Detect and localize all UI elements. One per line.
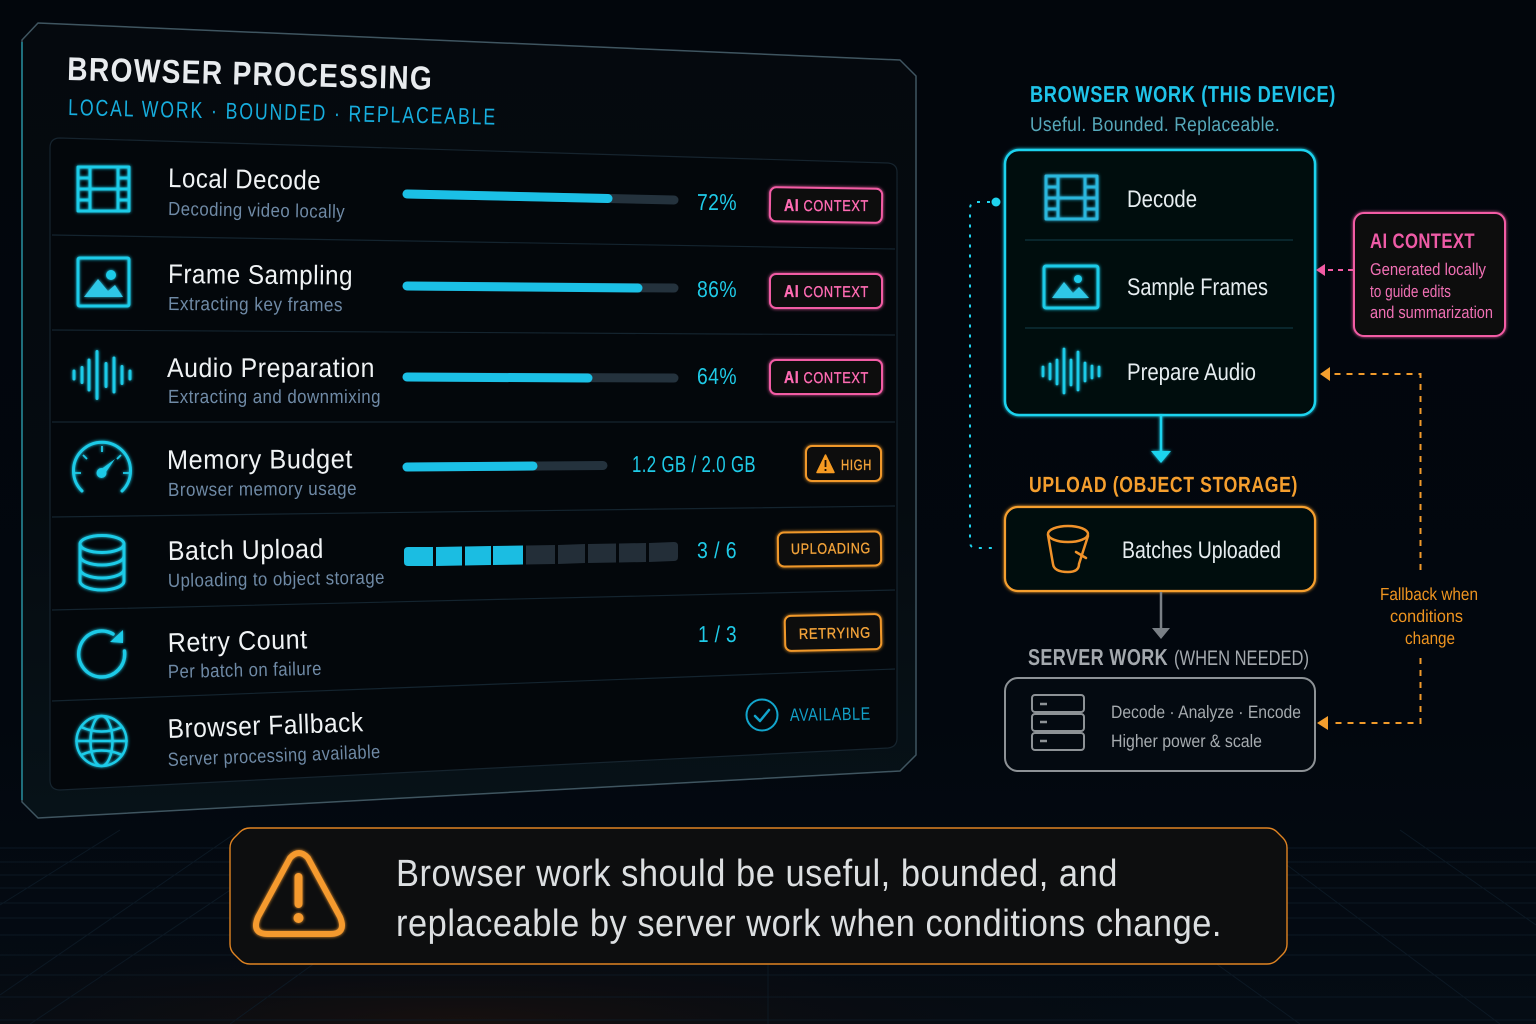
icon: waveform: [1043, 349, 1099, 393]
row: audio preparation: Audio Preparation: [167, 353, 375, 383]
row: local decode: 72%: [697, 189, 737, 215]
callout: warning banner: [230, 828, 1287, 964]
icon: gauge: [73, 442, 130, 491]
panel: upload box: [1005, 507, 1315, 591]
arrow: browser work to upload: [1151, 415, 1171, 463]
row: frame sampling: Frame Sampling: [168, 259, 353, 291]
panel: ai context callout: to guide edits: [1370, 282, 1451, 301]
icon: warning triangle: [256, 853, 342, 934]
row: retry count: 1 / 3: [698, 621, 737, 647]
label: decode: Decode: [1127, 186, 1197, 213]
panel: server work box: [1005, 678, 1315, 771]
progress bar 72%: [407, 194, 674, 200]
icon: database: [80, 536, 124, 590]
badge: high: [806, 446, 881, 481]
segmented progress 3 of 6: [404, 542, 678, 566]
label: fallback when conditions change: conditions: [1390, 606, 1463, 626]
heading: browser work: BROWSER WORK (THIS DEVICE): [1030, 81, 1336, 107]
icon: image: [78, 258, 129, 306]
panel: browser processing: [22, 23, 916, 818]
panel: ai context callout: [1354, 213, 1505, 336]
arrow: fallback to server work: [1317, 658, 1420, 730]
subheading: useful bounded replaceable: Useful. Bounded. Replaceable.: [1030, 114, 1280, 136]
row: batch upload: Batch Upload: [168, 534, 324, 566]
status: available: AVAILABLE: [790, 704, 871, 725]
badge: uploading: [778, 531, 881, 567]
label: prepare audio: Prepare Audio: [1127, 359, 1256, 386]
badge: ai context: AI CONTEXT: [784, 196, 869, 215]
heading: browser processing: BROWSER PROCESSING: [67, 50, 434, 97]
row: local decode: Local Decode: [168, 163, 321, 196]
label: fallback when conditions change: change: [1405, 628, 1455, 648]
badge: ai context: [770, 274, 882, 308]
row: memory budget: Browser memory usage: [168, 479, 357, 501]
row: frame sampling: 86%: [697, 276, 737, 302]
panel: ai context callout: AI CONTEXT: [1370, 230, 1475, 253]
heading: server work: SERVER WORK: [1028, 644, 1168, 670]
row: memory budget: [73, 442, 881, 501]
arrow: upload to server: [1152, 592, 1170, 639]
panel: ai context callout: Generated locally: [1370, 260, 1486, 279]
row: retry count: Per batch on failure: [168, 659, 322, 683]
text: server tasks: Higher power & scale: [1111, 731, 1262, 751]
subheading: local work: LOCAL WORK · BOUNDED · REPLACEABLE: [68, 94, 497, 130]
heading: server work: [1028, 644, 1309, 670]
label: fallback when conditions change: Fallback when: [1380, 584, 1478, 604]
row: memory budget: Memory Budget: [167, 444, 353, 475]
progress bar 86%: [407, 286, 674, 288]
label: fallback when conditions change: [1380, 584, 1478, 648]
badge: ai context: [770, 360, 882, 394]
badge: high: HIGH: [841, 457, 872, 474]
row: batch upload: Uploading to object storage: [168, 568, 385, 592]
label: sample frames: Sample Frames: [1127, 274, 1268, 301]
status: available: [746, 700, 871, 730]
progress bar 64%: [407, 377, 674, 378]
row: local decode: Decoding video locally: [168, 199, 345, 223]
icon: retry arrow: [79, 630, 125, 677]
row: batch upload: [80, 531, 881, 592]
row: audio preparation: Extracting and downmixing: [168, 387, 381, 408]
row: memory budget: 1.2 GB / 2.0 GB: [632, 451, 756, 477]
badge: ai context: AI CONTEXT: [784, 368, 869, 387]
icon: globe: [76, 716, 126, 766]
row: retry count: Retry Count: [167, 624, 308, 658]
panel: ai context callout: and summarization: [1370, 303, 1493, 322]
badge: ai context: [770, 187, 882, 223]
row: browser fallback: Browser Fallback: [167, 707, 364, 744]
icon: image: [1044, 266, 1098, 308]
arrow: ai context to browser work: [1316, 264, 1353, 276]
icon: bucket: [1048, 526, 1088, 572]
icon: server stack: [1032, 695, 1084, 750]
badge: retrying: RETRYING: [799, 624, 871, 643]
text: server tasks: [1111, 702, 1301, 751]
icon: waveform: [74, 352, 130, 398]
memory bar: [407, 466, 603, 467]
row: audio preparation: [74, 352, 882, 408]
row: frame sampling: [78, 258, 882, 316]
label: batches uploaded: Batches Uploaded: [1122, 537, 1281, 564]
heading: server work: (WHEN NEEDED): [1174, 647, 1309, 670]
text: key message: replaceable by server work when conditions change.: [396, 903, 1222, 945]
row: retry count: [79, 614, 881, 683]
row: frame sampling: Extracting key frames: [168, 294, 343, 316]
row: local decode: [78, 163, 882, 223]
badge: ai context: AI CONTEXT: [784, 282, 869, 301]
arrow: fallback to browser work: [1320, 367, 1420, 570]
badge: retrying: [785, 614, 881, 651]
icon: film: [78, 167, 129, 211]
text: key message: Browser work should be useful, bounded, and: [396, 853, 1118, 895]
arrow: dotted loop decode to upload: [970, 198, 1000, 548]
icon: film: [1046, 176, 1097, 219]
heading: upload: UPLOAD (OBJECT STORAGE): [1029, 472, 1298, 497]
row: browser fallback: Server processing available: [167, 742, 381, 771]
badge: uploading: UPLOADING: [791, 540, 871, 558]
row: batch upload: 3 / 6: [697, 537, 737, 563]
text: key message: [396, 853, 1222, 945]
text: server tasks: Decode · Analyze · Encode: [1111, 702, 1301, 722]
row: browser fallback: [76, 700, 871, 771]
panel: browser work box: [1005, 150, 1315, 415]
row: audio preparation: 64%: [697, 363, 737, 389]
